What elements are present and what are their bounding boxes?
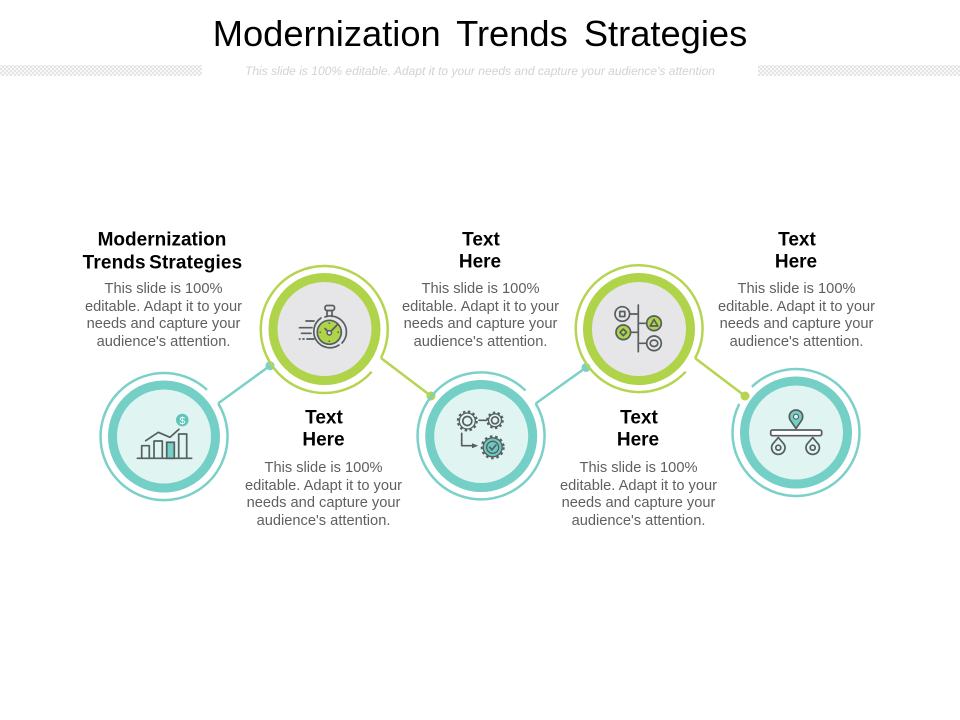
connector 4 to 5	[695, 358, 750, 400]
text block 2: Here	[302, 430, 345, 450]
text block 4: audience's attention.	[572, 513, 705, 529]
text block 5	[718, 230, 875, 350]
text block 2: audience's attention.	[257, 513, 390, 529]
text block 1: Trends Strategies	[83, 252, 242, 274]
text block 1: This slide is 100%	[104, 281, 222, 297]
text block 1: Modernization	[98, 230, 226, 250]
icon: branching shapes	[615, 305, 661, 352]
left hatched band	[0, 65, 202, 76]
node 1: teal circle with chart icon	[101, 373, 228, 500]
text block 1: needs and capture your	[87, 316, 241, 332]
connector 2 to 3	[381, 358, 436, 400]
text block 2: This slide is 100%	[264, 460, 382, 476]
title: Modernization Trends Strategies	[213, 13, 747, 54]
text block 4: Here	[617, 430, 659, 450]
text block 3: Here	[459, 252, 501, 272]
icon: stopwatch	[300, 306, 346, 348]
text block 3: This slide is 100%	[422, 281, 540, 297]
text block 5: Text	[778, 230, 816, 250]
subtitle: This slide is 100% editable. Adapt it to your needs and capture your audience's attention	[245, 64, 715, 78]
text block 5: editable. Adapt it to your	[718, 299, 875, 315]
node 5: teal circle with pipeline location icon	[733, 369, 860, 496]
right hatched band	[758, 65, 960, 76]
text block 3: needs and capture your	[404, 316, 558, 332]
node 2: green circle with stopwatch icon	[261, 266, 388, 393]
text block 4: Text	[620, 408, 658, 428]
text block 2: Text	[305, 408, 343, 428]
text block 1	[83, 230, 242, 350]
icon: bar chart with dollar coin: $	[179, 415, 185, 427]
text block 4	[560, 408, 717, 529]
text block 5: audience's attention.	[730, 334, 863, 350]
text block 4: editable. Adapt it to your	[560, 478, 717, 494]
text block 1: editable. Adapt it to your	[85, 299, 242, 315]
text block 2	[245, 408, 402, 529]
text block 5: This slide is 100%	[738, 281, 856, 297]
connector 3 to 4	[536, 363, 590, 404]
icon: gears with check	[458, 412, 504, 458]
text block 3: editable. Adapt it to your	[402, 299, 559, 315]
connector 1 to 2	[218, 361, 274, 403]
text block 1: audience's attention.	[97, 334, 230, 350]
node 3: teal circle with gears icon	[418, 372, 545, 499]
text block 5: Here	[775, 252, 817, 272]
text block 2: needs and capture your	[247, 495, 401, 511]
text block 3: Text	[462, 230, 500, 250]
text block 4: needs and capture your	[562, 495, 716, 511]
text block 4: This slide is 100%	[580, 460, 698, 476]
node 4: green circle with tree icon	[576, 265, 703, 392]
text block 3	[402, 230, 559, 350]
text block 5: needs and capture your	[720, 316, 874, 332]
icon: location pin and drops	[771, 410, 822, 454]
text block 2: editable. Adapt it to your	[245, 478, 402, 494]
text block 3: audience's attention.	[414, 334, 547, 350]
